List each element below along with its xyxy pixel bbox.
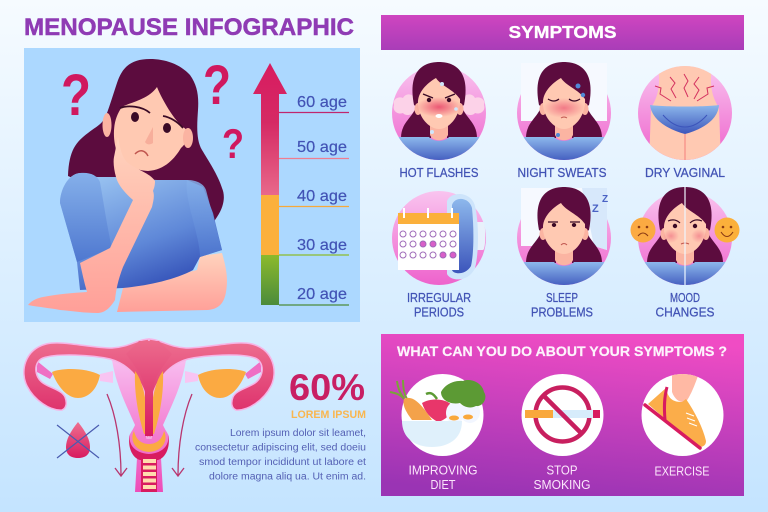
title: MENOPAUSE INFOGRAPHIC: [24, 14, 354, 41]
label: mood changes: [656, 291, 714, 320]
description text: consectetur adipiscing elit, sed doeiu: [195, 442, 366, 454]
label: irregular periods: IRREGULAR: [407, 291, 471, 305]
arrows: downward flow: [107, 394, 192, 476]
panel: symptoms heading: [381, 15, 744, 50]
symptom: mood changes: [630, 186, 740, 288]
symptom: hot flashes: [392, 62, 486, 163]
symptom: dry vaginal: [638, 66, 732, 163]
label: night sweats: NIGHT SWEATS: [518, 166, 606, 180]
labels: actions: IMPROVING: [408, 464, 478, 478]
label: sleep problems: SLEEP: [546, 291, 578, 305]
stat label: LOREM IPSUM: [291, 409, 366, 421]
label: mood changes: CHANGES: [656, 306, 714, 320]
age scale labels: 50 age: [297, 139, 347, 156]
symptom: sleep problems: Z: [602, 194, 608, 205]
shirt body: [60, 173, 222, 290]
labels: actions: DIET: [430, 478, 456, 492]
label: irregular periods: [407, 291, 471, 320]
age arrow: [253, 63, 287, 305]
icon: no smoking: [522, 374, 604, 456]
symptom: sleep problems: Z: [592, 203, 599, 215]
description text: [195, 428, 366, 482]
labels: actions: STOP: [546, 464, 578, 478]
age scale labels: 40 age: [297, 188, 347, 205]
lower arm: [117, 253, 227, 312]
labels: actions: EXERCISE: [654, 464, 710, 478]
panel heading: WHAT CAN YOU DO ABOUT YOUR SYMPTOMS ?: [397, 344, 727, 359]
labels: actions: [408, 464, 710, 492]
symptom: night sweats: [517, 62, 611, 163]
description text: dolore magna aliq ua. Ut enim ad.: [209, 472, 366, 482]
labels: actions: SMOKING: [534, 478, 590, 492]
symptom: irregular periods: [392, 191, 486, 285]
stat: 60%: 60%: [289, 367, 365, 408]
age scale labels: 30 age: [297, 237, 347, 254]
label: hot flashes: HOT FLASHES: [400, 166, 478, 180]
icon: question marks: ?: [222, 120, 244, 167]
description text: smod tempor incididunt ut labore et: [199, 457, 366, 468]
symptom: sleep problems: [517, 187, 611, 288]
forearm and hand: [28, 137, 155, 313]
label: irregular periods: PERIODS: [414, 306, 464, 320]
panel: what can you do: [381, 334, 744, 496]
label: mood changes: MOOD: [670, 291, 700, 305]
icon: running shoe: [642, 370, 724, 456]
face: [114, 87, 188, 171]
age scale labels: 20 age: [297, 286, 347, 303]
icon: question marks: [61, 53, 244, 167]
illustration: thinking woman: [28, 59, 227, 313]
icon: crossed blood drop: [57, 422, 99, 458]
panel: symptoms heading: SYMPTOMS: [508, 22, 616, 42]
reproductive system illustration: [24, 339, 274, 492]
sleeves: [60, 173, 112, 262]
age scale labels: [279, 94, 349, 305]
label: sleep problems: PROBLEMS: [531, 306, 593, 320]
description text: Lorem ipsum dolor sit leamet,: [230, 428, 366, 439]
panel: age and woman: [24, 48, 360, 322]
label: dry vaginal: DRY VAGINAL: [645, 166, 725, 180]
age scale labels: 60 age: [297, 94, 347, 111]
icon: diet bowl: [390, 374, 485, 456]
icon: question marks: ?: [203, 53, 231, 116]
label: sleep problems: [531, 291, 593, 320]
icon: question marks: ?: [61, 63, 91, 128]
